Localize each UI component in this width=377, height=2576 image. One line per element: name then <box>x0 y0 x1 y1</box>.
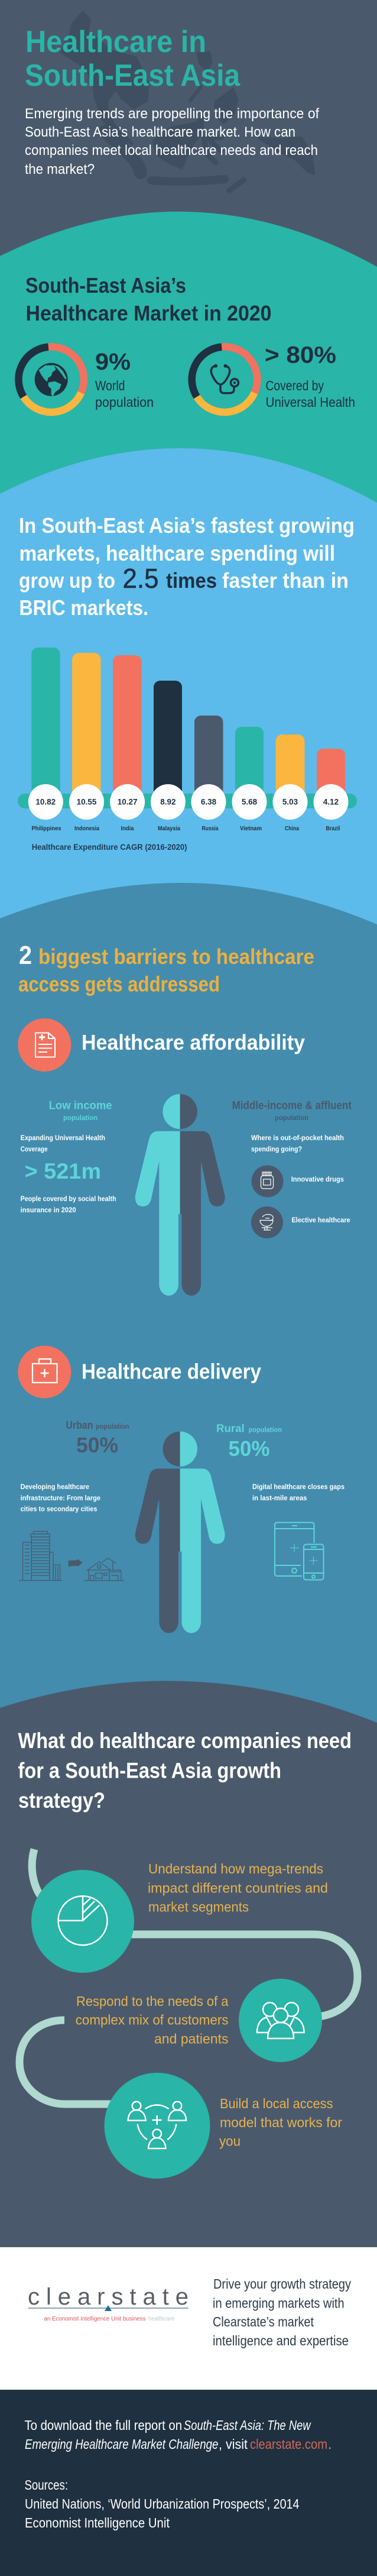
column: middle income and affluent population: Middle-income & affluent <box>232 1100 352 1112</box>
logo: Clearstate <box>28 2284 188 2322</box>
logo: Clearstate: clearstate <box>28 2284 188 2310</box>
footer: download call to action: To download the full report on <box>25 2418 182 2433</box>
heading: market in 2020: Healthcare Market in 2020 <box>26 301 272 325</box>
intro paragraph: the market? <box>25 161 95 177</box>
intro paragraph <box>25 106 319 177</box>
column: rural population: Rural <box>216 1422 245 1434</box>
panel: market 2020 background <box>0 212 377 514</box>
path: winding journey line <box>20 1849 358 2104</box>
title: Healthcare in <box>25 25 206 59</box>
column: urban population: infrastructure: From large <box>21 1494 100 1502</box>
bar chart: healthcare expenditure CAGR: 4.12 <box>323 797 339 807</box>
step 3 text: model that works for <box>220 2115 342 2130</box>
panel: growth strategy background <box>0 1681 377 2253</box>
heading: spending growth: times <box>166 568 217 593</box>
column: low income population: Expanding Universal Health <box>21 1134 105 1142</box>
heading: growth strategy question: strategy? <box>18 1788 105 1813</box>
bar chart: healthcare expenditure CAGR: China <box>285 825 299 832</box>
column: urban population: cities to secondary cities <box>21 1505 98 1513</box>
stat: over 80% covered: > 80% <box>265 342 336 368</box>
column: rural population: population <box>249 1426 282 1433</box>
panel: Clearstate promo background <box>0 2247 377 2390</box>
column: middle income and affluent population: spending going? <box>251 1145 302 1153</box>
heading: two biggest barriers: access gets addressed <box>18 972 220 996</box>
step 3: local access network icon <box>104 2073 210 2179</box>
heading: spending growth: faster than in <box>222 568 349 593</box>
column: low income population: population <box>63 1115 98 1122</box>
heading: growth strategy question: for a South-East Asia growth <box>18 1759 281 1782</box>
bar chart: healthcare expenditure CAGR: 10.82 <box>35 797 56 807</box>
stat: over 80% covered: Covered by <box>266 378 324 393</box>
footer: download call to action: , visit <box>219 2436 248 2452</box>
chart caption: Healthcare Expenditure CAGR (2016-2020) <box>32 843 187 852</box>
panel: footer background <box>0 2390 377 2576</box>
column: urban population: population <box>96 1423 129 1431</box>
step 2 text: and patients <box>154 2031 228 2047</box>
donut: universal health with stethoscope <box>192 347 257 412</box>
bar chart: healthcare expenditure CAGR: Indonesia <box>74 825 99 832</box>
step 3 text: Build a local access <box>220 2096 333 2111</box>
footer: sources: Economist Intelligence Unit <box>25 2515 170 2530</box>
bar chart: healthcare expenditure CAGR: Brazil <box>326 825 340 832</box>
column: middle income and affluent population: population <box>275 1115 308 1122</box>
icon: suburban house <box>84 1558 124 1581</box>
bar chart: healthcare expenditure CAGR: 5.03 <box>282 797 298 807</box>
column: rural population: in last-mile areas <box>252 1494 307 1502</box>
column: rural population: Digital healthcare closes gaps <box>252 1483 344 1491</box>
stat: 9% world population: 9% <box>95 349 131 375</box>
bar chart: healthcare expenditure CAGR: Vietnam <box>240 825 262 832</box>
heading: spending growth <box>19 513 355 620</box>
promo text: Drive your growth strategy <box>213 2276 351 2292</box>
heading: spending growth: grow up to <box>19 568 115 593</box>
promo text <box>213 2276 351 2348</box>
footer: sources: Sources: <box>25 2477 68 2493</box>
column: urban population: Urban <box>66 1419 93 1431</box>
step 1 text: market segments <box>148 1899 249 1915</box>
heading: two biggest barriers: biggest barriers to healthcare <box>38 944 314 969</box>
step 3 text <box>219 2096 342 2149</box>
title: South-East Asia <box>25 59 240 93</box>
figure: urban and rural person <box>135 1432 225 1633</box>
footer: download call to action: Emerging Healthcare Market Challenge <box>25 2436 218 2452</box>
footer: download call to action <box>25 2418 332 2452</box>
arrow: city to town <box>69 1559 83 1567</box>
step 1: market trends pie icon <box>31 1870 134 1973</box>
bar chart: healthcare expenditure CAGR: 10.55 <box>77 797 97 807</box>
bar chart: healthcare expenditure CAGR: Russia <box>202 825 219 832</box>
panel: intro background <box>0 0 377 272</box>
column: urban population <box>21 1419 129 1513</box>
stat: 9% world population <box>95 349 154 410</box>
bar chart: healthcare expenditure CAGR: 5.68 <box>242 797 258 807</box>
heading: two biggest barriers: 2 <box>19 941 32 970</box>
step 1 text: impact different countries and <box>148 1881 328 1896</box>
bar chart: healthcare expenditure CAGR: 6.38 <box>201 797 217 807</box>
icon: drug bottle <box>252 1165 284 1197</box>
column: low income population: People covered by social health <box>21 1195 116 1203</box>
column: low income population <box>21 1100 116 1214</box>
icon: city buildings <box>19 1532 62 1580</box>
heading: two biggest barriers <box>18 941 314 996</box>
column: urban population: Developing healthcare <box>21 1483 89 1491</box>
bar chart: healthcare expenditure CAGR <box>18 648 357 832</box>
bar chart: healthcare expenditure CAGR: 8.92 <box>160 797 176 807</box>
title <box>25 25 240 93</box>
column: middle income and affluent population <box>232 1100 352 1224</box>
step 2 text: Respond to the needs of a <box>76 1994 229 2009</box>
step 1 text: Understand how mega-trends <box>148 1861 323 1876</box>
logo: Clearstate: healthcare <box>148 2316 174 2322</box>
icon: bowl and snake <box>251 1206 283 1238</box>
intro paragraph: South-East Asia’s healthcare market. How can <box>25 124 295 140</box>
map: South-East Asia silhouette <box>61 12 314 190</box>
heading: healthcare delivery: Healthcare delivery <box>82 1360 261 1384</box>
footer: sources: United Nations, ‘World Urbanization Prospects’, 2014 <box>25 2496 300 2512</box>
heading: spending growth: BRIC markets. <box>19 596 148 620</box>
step 3 text: you <box>219 2134 240 2149</box>
bar chart: healthcare expenditure CAGR: Malaysia <box>158 825 180 832</box>
column: low income population: > 521m <box>25 1159 101 1183</box>
column: low income population: Coverage <box>21 1145 48 1153</box>
column: low income population: Low income <box>49 1100 112 1112</box>
column: middle income and affluent population: Where is out-of-pocket health <box>251 1134 344 1142</box>
step 2 text <box>76 1994 229 2047</box>
step 2: customers group icon <box>239 1979 322 2062</box>
column: urban population: 50% <box>76 1433 118 1457</box>
column: rural population <box>216 1422 344 1502</box>
panel: barriers background <box>0 883 377 1745</box>
heading: healthcare affordability: Healthcare affordability <box>82 1030 305 1054</box>
column: middle income and affluent population: Elective healthcare <box>292 1216 350 1224</box>
stat: 9% world population: World <box>95 378 125 393</box>
bar chart: healthcare expenditure CAGR: 10.27 <box>118 797 137 807</box>
bar chart: healthcare expenditure CAGR: Philippines <box>32 825 61 832</box>
column: rural population: 50% <box>228 1436 269 1461</box>
stat: 9% world population: population <box>95 394 154 410</box>
heading: spending growth: markets, healthcare spending will <box>19 541 335 565</box>
step 1 text <box>148 1861 328 1915</box>
donut: world population with globe <box>18 347 84 412</box>
icon: medical document <box>18 1018 71 1072</box>
heading: market in 2020 <box>25 273 272 325</box>
promo text: Clearstate’s market <box>213 2314 314 2329</box>
icon: first aid case <box>18 1346 71 1398</box>
promo text: intelligence and expertise <box>213 2333 349 2348</box>
promo text: in emerging markets with <box>213 2296 344 2311</box>
footer: download call to action: . <box>328 2436 332 2452</box>
step 2 text: complex mix of customers <box>76 2012 228 2027</box>
footer: download call to action: South-East Asia: The New <box>184 2418 311 2433</box>
intro paragraph: companies meet local healthcare needs and reach <box>25 143 318 158</box>
stat: over 80% covered <box>265 342 355 410</box>
icon: tablet and phone <box>275 1522 324 1580</box>
intro paragraph: Emerging trends are propelling the importance of <box>25 106 319 122</box>
stat: over 80% covered: Universal Health <box>266 394 355 410</box>
column: middle income and affluent population: Innovative drugs <box>291 1175 344 1183</box>
figure: low income and affluent person <box>135 1094 225 1296</box>
footer: download call to action: clearstate.com <box>250 2436 327 2452</box>
panel: spending growth background <box>0 448 377 946</box>
bar chart: healthcare expenditure CAGR: India <box>121 825 134 832</box>
heading: market in 2020: South-East Asia’s <box>25 273 186 297</box>
heading: spending growth: In South-East Asia’s fastest growing <box>19 513 355 538</box>
heading: growth strategy question <box>18 1729 352 1813</box>
logo: Clearstate: an Economist Intelligence Unit business <box>44 2316 145 2322</box>
column: low income population: insurance in 2020 <box>21 1206 76 1214</box>
heading: spending growth: 2.5 <box>123 563 158 594</box>
footer: sources <box>25 2477 300 2530</box>
